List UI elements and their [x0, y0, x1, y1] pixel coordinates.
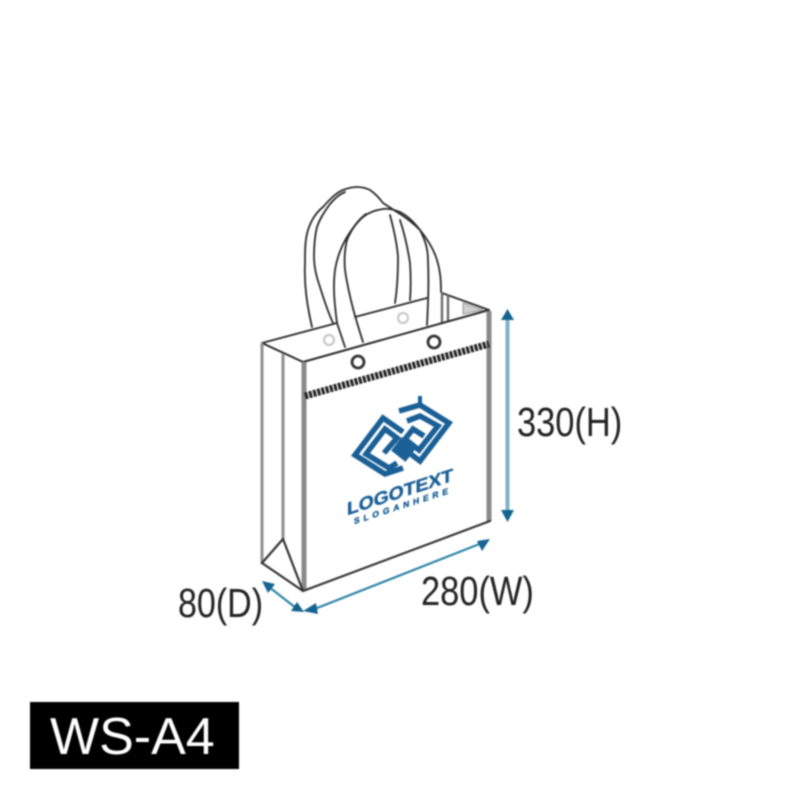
bag front top edge — [262, 310, 489, 362]
bottom edges and gusset fold — [262, 521, 490, 591]
bag illustration — [262, 187, 490, 591]
model badge — [30, 702, 239, 769]
stitched band — [305, 344, 489, 396]
model badge: WS-A4 — [50, 708, 215, 766]
back handle — [305, 187, 441, 327]
width dimension arrow — [303, 539, 490, 614]
front eyelets — [352, 336, 440, 368]
front handle — [334, 209, 428, 347]
logo emblem — [355, 396, 449, 474]
inner gusset folds — [442, 294, 448, 323]
depth dimension arrow — [262, 581, 304, 612]
far gusset triangle — [463, 303, 483, 314]
front panel side edges — [304, 311, 489, 591]
height dimension arrow — [501, 309, 514, 522]
label: width: 280(W) — [421, 569, 534, 615]
label: depth: 80(D) — [178, 580, 263, 626]
back eyelets — [324, 313, 408, 345]
logo wordmark: SLOGANHERE — [354, 486, 448, 526]
back top edge of bag — [262, 293, 489, 343]
logo wordmark: LOGOTEXT — [347, 464, 454, 519]
label: height: 330(H) — [517, 400, 622, 446]
left gusset edges — [262, 344, 283, 563]
